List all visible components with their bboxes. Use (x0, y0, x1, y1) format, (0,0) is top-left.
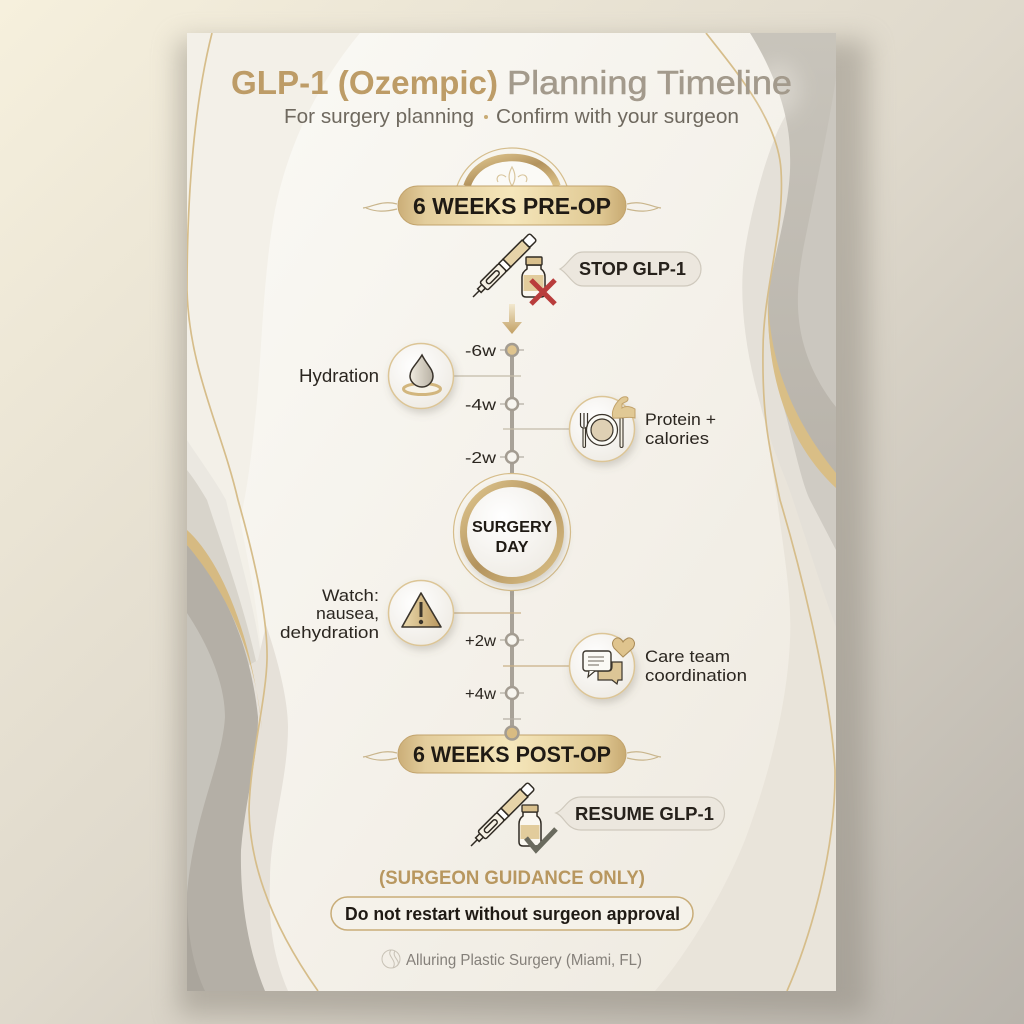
timeline axis (465, 343, 524, 733)
item: hydration: Hydration (299, 366, 379, 386)
flourishes (363, 203, 661, 211)
item: watch nausea, dehydration: dehydration (280, 623, 379, 642)
title (231, 64, 792, 101)
warning pill: Do not restart without surgeon approval (345, 904, 680, 924)
item: care team coordination: coordination (645, 666, 747, 685)
title: Planning Timeline (507, 64, 792, 101)
surgery day badge: SURGERY (472, 519, 552, 536)
footer brand: Alluring Plastic Surgery (Miami, FL) (406, 952, 642, 969)
icon: warning triangle (402, 593, 441, 627)
marker -6w (465, 343, 518, 360)
icon: brand mark (382, 950, 400, 968)
marker overlapping post-op pill (506, 726, 518, 740)
marker -4w: -4w (465, 397, 497, 414)
icon: plate, cutlery and arm (580, 397, 635, 448)
heading: 6 weeks post-op: 6 WEEKS POST-OP (413, 742, 611, 767)
item: care team coordination (503, 634, 747, 698)
heading: 6 weeks pre-op: 6 WEEKS PRE-OP (413, 193, 611, 219)
callout: stop GLP-1: STOP GLP-1 (579, 259, 686, 279)
icon: chat bubbles and heart (583, 638, 634, 684)
marker -4w (465, 397, 518, 414)
marker -2w: -2w (465, 450, 497, 467)
callout: stop GLP-1 (560, 252, 701, 286)
icon: pen and vial with check mark (467, 782, 556, 850)
item: care team coordination: Care team (645, 647, 730, 666)
callout: resume GLP-1: RESUME GLP-1 (575, 804, 714, 824)
subtitle (284, 106, 739, 128)
note: surgeon guidance only: (SURGEON GUIDANCE ONLY) (379, 868, 645, 889)
arrow: down to timeline (502, 304, 522, 334)
marker +4w (465, 686, 518, 703)
surgery day badge (454, 474, 570, 590)
title: GLP-1 (Ozempic) (231, 64, 498, 101)
subtitle: Confirm with your surgeon (496, 106, 739, 128)
icon: water drop (404, 355, 440, 394)
warning pill (331, 897, 693, 930)
poster drop shadow (178, 40, 868, 1015)
icon: pen and vial with red cross (469, 233, 555, 304)
pill (398, 186, 626, 225)
item: protein + calories (503, 396, 716, 462)
marker -2w (465, 450, 518, 467)
item: hydration (299, 344, 521, 408)
marker -6w: -6w (465, 343, 497, 360)
marker +2w (465, 633, 518, 650)
item: protein + calories: Protein + (645, 410, 716, 429)
heading: 6 weeks pre-op (363, 148, 661, 225)
item: watch nausea, dehydration: nausea, (316, 604, 379, 623)
heading: 6 weeks post-op (363, 735, 661, 773)
item: watch nausea, dehydration (280, 580, 521, 646)
marker +4w: +4w (465, 686, 496, 703)
callout: resume GLP-1 (556, 797, 724, 830)
arch ornament (457, 148, 567, 186)
poster panel with flowing background waves (187, 33, 836, 991)
subtitle: For surgery planning (284, 106, 474, 128)
item: watch nausea, dehydration: Watch: (322, 586, 379, 605)
surgery day badge: DAY (496, 539, 529, 556)
marker +2w: +2w (465, 633, 496, 650)
item: protein + calories: calories (645, 429, 709, 448)
